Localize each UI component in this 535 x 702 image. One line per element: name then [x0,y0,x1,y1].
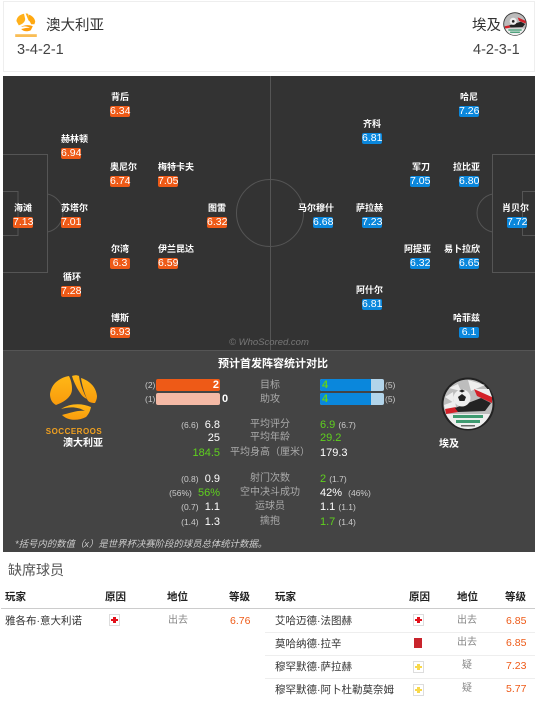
table: Australia missing players [1,591,265,627]
stat row: average height: 179.3 [320,447,348,459]
row: 雅各布·意大利诺: 6.76 [230,615,250,627]
stat row: tackles [181,515,356,528]
stat row: average rating [181,418,356,431]
icon: doubtful [413,684,424,696]
player: 循环: 循环 [63,272,81,282]
stats: assists bars: 0 [222,393,228,405]
player: 海滩 [13,203,33,228]
stat row: average rating: 6.9 (6.7) [320,419,356,431]
player: 阿提亚: 阿提亚 [404,244,431,254]
player: 背后 [110,92,130,117]
heading: missing players: 缺席球员 [8,562,64,578]
icon: Socceroos crest: SOCCEROOS [46,427,102,436]
row: 穆罕默德·阿卜杜勒莫奈姆 [265,679,535,701]
player: 易卜拉欣 [444,244,480,269]
row: 穆罕默德·阿卜杜勒莫奈姆: 5.77 [506,683,526,695]
panel: pitch [3,76,535,350]
table header: 玩家 [5,591,26,603]
player: 军刀 [410,162,430,187]
player: 拉比亚: 6.80 [459,175,479,187]
row: 艾哈迈德·法图赫: 艾哈迈德·法图赫 [275,615,352,627]
table header: 原因 [409,591,430,603]
table header: 地位 [457,591,478,603]
player: 易卜拉欣: 6.65 [459,257,479,269]
player: 阿什尔: 阿什尔 [356,285,383,295]
stat row: shots: 2 (1.7) [320,473,347,485]
row: 雅各布·意大利诺: 出去 [168,615,188,626]
stat row: shots: 射门次数 [250,473,290,484]
player: 海滩: 海滩 [14,203,32,213]
player: 哈菲兹: 6.1 [462,326,476,338]
player: 苏塔尔: 7.01 [61,216,81,228]
row: 雅各布·意大利诺: 雅各布·意大利诺 [5,615,82,627]
player: 伊兰昆达 [158,244,194,269]
formation: Egypt: 4-2-3-1 [473,42,520,58]
stat row: average height: 平均身高（厘米） [230,447,310,458]
row: 穆罕默德·萨拉赫: 穆罕默德·萨拉赫 [275,661,352,673]
player: 易卜拉欣: 易卜拉欣 [444,244,480,254]
bar: Egypt assists: 4 [322,393,328,405]
player: 尔湾: 6.3 [113,257,127,269]
row: 莫哈纳德·拉辛 [265,633,535,656]
row: 莫哈纳德·拉辛: 6.85 [506,637,526,649]
player: 循环: 7.28 [61,285,81,297]
table header [265,588,535,609]
stat row: average rating: 平均评分 [250,419,290,430]
row: 穆罕默德·萨拉赫: 疑 [462,660,472,671]
player: 肖贝尔: 7.72 [507,216,527,228]
bar: Australia goals [156,379,220,391]
player: 哈尼 [459,92,479,117]
table header [1,588,270,609]
player: 萨拉赫: 7.23 [362,216,382,228]
player: 赫林顿 [61,134,88,159]
stat row: aerial duels: (56%) 56% [169,487,220,499]
player: 阿什尔 [356,285,383,310]
stat row: aerial duels: 42% (46%) [320,487,371,499]
player: 梅特卡夫: 7.05 [158,175,178,187]
bar: Egypt assists [320,393,384,405]
stat row: average age: 平均年龄 [250,432,290,443]
stat row: average height [192,446,348,459]
icon: Egypt crest large [442,378,494,430]
player: 阿提亚: 6.32 [410,257,430,269]
stats: assists bars: (5) [385,394,395,404]
team label: Egypt: 埃及 [439,439,459,450]
player: 萨拉赫 [356,202,383,228]
row: 穆罕默德·阿卜杜勒莫奈姆: 疑 [462,683,472,694]
stat row: tackles: 1.7 (1.4) [320,516,356,528]
player: 海滩: 7.13 [13,216,33,228]
player: 军刀: 7.05 [410,175,430,187]
row: 艾哈迈德·法图赫 [265,610,535,633]
player: 梅特卡夫: 梅特卡夫 [158,162,194,172]
bar: Egypt goals: 4 [322,379,328,391]
pitch markings [3,76,535,350]
player: 尔湾 [110,244,130,269]
player: 拉比亚: 拉比亚 [453,162,480,172]
table header: 原因 [105,591,126,603]
stat row: average age [208,431,341,444]
row: 穆罕默德·萨拉赫 [265,656,535,679]
team name: Egypt: 埃及 [472,18,501,34]
stat row: average age: 25 [208,432,220,444]
player: 奥尼尔: 6.74 [110,175,130,187]
icon: Australia crest [15,13,37,37]
player: 图雷 [207,203,227,228]
player: 齐科: 齐科 [363,119,381,129]
table header: 等级 [229,591,250,603]
icon: doubtful [413,661,424,673]
player: 梅特卡夫 [158,162,194,187]
row: 雅各布·意大利诺 [5,614,250,627]
player: 奥尼尔 [110,162,137,187]
row: 莫哈纳德·拉辛: 莫哈纳德·拉辛 [275,638,342,650]
icon: Socceroos crest [46,375,102,436]
stat row: aerial duels: 空中决斗成功 [240,487,300,498]
stats: goals bars [145,379,395,391]
player: 图雷: 6.32 [207,216,227,228]
stats: assists bars [145,393,395,405]
player: 阿提亚 [404,244,431,269]
stat label: assists: 助攻 [260,394,280,405]
player: 苏塔尔: 苏塔尔 [61,203,88,213]
stat row: average height: 184.5 [192,447,220,459]
table: Egypt missing players [265,588,535,702]
row: 莫哈纳德·拉辛: 出去 [457,637,477,648]
table header: 玩家 [275,591,296,603]
icon: injury [109,614,120,626]
players: Australia [13,92,227,338]
footnote: *括号内的数值（x）是世界杯决赛阶段的球员总体统计数据。 [15,538,267,549]
player: 循环 [61,272,81,297]
bar: Australia goals: 2 [213,379,219,391]
player: 哈菲兹: 哈菲兹 [453,313,480,323]
player: 奥尼尔: 奥尼尔 [110,162,137,172]
player: 伊兰昆达: 6.59 [158,257,178,269]
icon: red card [414,638,422,648]
player: 苏塔尔 [61,203,88,228]
stats: goals bars: (2) [145,380,155,390]
icon: injury [413,614,424,626]
panel: lineup stats comparison [3,350,535,552]
watermark: © WhoScored.com [229,337,309,348]
player: 马尔穆什: 马尔穆什 [298,203,334,213]
bar: Australia assists [156,393,220,405]
player: 齐科 [362,119,382,144]
player: 背后: 背后 [111,92,129,102]
stat row: tackles: (1.4) 1.3 [181,516,220,528]
players: Egypt [298,92,529,338]
row: 穆罕默德·萨拉赫: 7.23 [506,660,526,672]
stat row: average age: 29.2 [320,432,341,444]
match header [3,1,535,72]
stat row: average rating: (6.6) 6.8 [181,419,220,431]
player: 赫林顿: 赫林顿 [61,134,88,144]
stat row: shots: (0.8) 0.9 [181,473,220,485]
player: 赫林顿: 6.94 [61,147,81,159]
player: 肖贝尔 [502,203,529,228]
player: 肖贝尔: 肖贝尔 [502,203,529,213]
player: 齐科: 6.81 [362,132,382,144]
player: 博斯: 博斯 [111,313,129,323]
player: 拉比亚 [453,162,480,187]
team label: Australia: 澳大利亚 [63,438,103,449]
stats: assists bars: (1) [145,394,155,404]
stat row: aerial duels [169,486,371,499]
table header: 等级 [505,591,526,603]
bar: Egypt goals [320,379,384,391]
stat row: dribbles: 1.1 (1.1) [320,501,356,513]
stat label: goals: 目标 [260,380,280,391]
player: 伊兰昆达: 伊兰昆达 [158,244,194,254]
player: 背后: 6.34 [110,105,130,117]
player: 博斯: 6.93 [110,326,130,338]
player: 马尔穆什: 6.68 [313,216,333,228]
stat row: dribbles: 运球员 [255,501,285,512]
row: 艾哈迈德·法图赫: 出去 [457,615,477,626]
icon: Egypt crest [503,12,527,36]
heading: stats: 预计首发阵容统计对比 [218,358,328,370]
player: 哈尼: 7.26 [459,105,479,117]
player: 萨拉赫: 萨拉赫 [356,203,383,213]
stat row: dribbles: (0.7) 1.1 [181,501,220,513]
stat row: dribbles [181,500,356,513]
row: 艾哈迈德·法图赫: 6.85 [506,615,526,627]
player: 阿什尔: 6.81 [362,298,382,310]
formation: Australia: 3-4-2-1 [17,42,64,58]
player: 哈菲兹 [453,313,480,338]
player: 哈尼: 哈尼 [460,92,478,102]
player: 图雷: 图雷 [208,203,226,213]
stat row: tackles: 擒抱 [260,516,280,527]
player: 马尔穆什 [298,203,334,228]
team name: Australia: 澳大利亚 [46,18,104,34]
row: 穆罕默德·阿卜杜勒莫奈姆: 穆罕默德·阿卜杜勒莫奈姆 [275,684,394,696]
player: 尔湾: 尔湾 [111,244,129,254]
stats: goals bars: (5) [385,380,395,390]
player: 博斯 [110,313,130,338]
player: 军刀: 军刀 [412,162,430,172]
table header: 地位 [167,591,188,603]
stat row: shots [181,472,347,485]
